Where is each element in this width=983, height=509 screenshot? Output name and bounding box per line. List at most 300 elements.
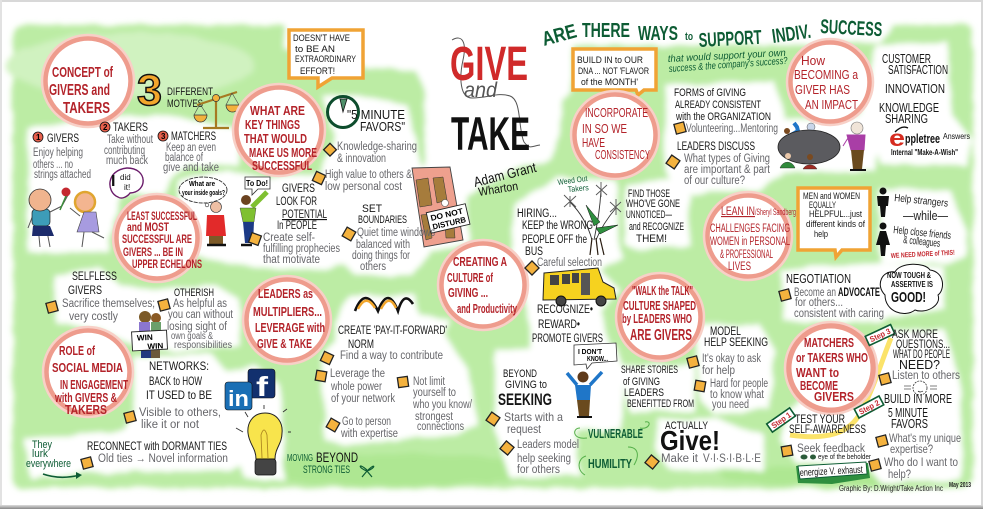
note: they lurk everywhere: They	[32, 439, 52, 451]
title: Give and Take: Wharton	[477, 179, 519, 199]
illustration: man in red	[206, 202, 226, 245]
header: are there ways: to	[685, 31, 693, 43]
header: are there ways: ARE	[540, 21, 579, 51]
text: beyond giving to seeking: GIVING to	[505, 379, 547, 391]
bullet: who do I want to help	[869, 455, 958, 481]
text: otherish	[158, 287, 234, 351]
text: forms of giving	[674, 87, 778, 135]
text: build in more 5 minute favors: BUILD IN MORE	[884, 392, 952, 406]
panel: role of social media: with GIVERS &	[54, 391, 117, 405]
banner: energize v exhaust: energize V. exhaust	[800, 465, 863, 479]
text: networks back to how it used to be: NETWORKS:	[149, 359, 209, 373]
logo: appletree answers: Internal "Make-A-Wish"	[891, 148, 958, 157]
text: find those who have gone unnoticed	[626, 188, 684, 245]
icon: man and woman silhouettes	[876, 188, 890, 256]
panel: concept of givers and takers: CONCEPT of	[52, 64, 114, 81]
text: networks back to how it used to be: BACK to HOW	[149, 374, 202, 388]
text: actually give make it visible	[645, 420, 761, 469]
text: model help seeking: HELP SEEKING	[704, 335, 768, 349]
text: selfless givers: Sacrifice themselves;	[62, 298, 155, 310]
icon: balance scale	[194, 92, 239, 128]
illustration: win win couple with sign: WIN	[137, 333, 153, 343]
words: vulnerable and humility	[575, 422, 649, 475]
bullet: leverage the whole power: Leverage the	[330, 368, 385, 380]
text: beyond giving to seeking: SEEKING	[498, 390, 552, 409]
panel: least successful and most successful: SUCCESSFUL ARE	[122, 234, 192, 246]
panel: creating a culture of giving: GIVING ...	[448, 286, 488, 300]
text: actually give make it visible: Make it	[661, 453, 699, 465]
text: ask more questions: QUESTIONS...	[896, 337, 950, 351]
text: model help seeking: MODEL	[710, 324, 741, 338]
bullet: careful selection: Careful selection	[537, 257, 602, 269]
text: negotiation: consistent with caring	[794, 308, 884, 320]
title: Give and Take: Adam Grant	[472, 159, 538, 190]
panel: creating a culture of giving: CULTURE of	[447, 271, 494, 285]
text: negotiation: Become an	[794, 287, 836, 299]
panel: role of social media: SOCIAL MEDIA	[52, 361, 123, 375]
panel: matchers or takers who want to become givers: MATCHERS	[804, 336, 854, 350]
text: forms of giving: FORMS of GIVING	[674, 87, 746, 99]
bullet: listen to others with face: Listen to others	[892, 370, 960, 382]
bullet: listen to others with face	[879, 370, 960, 395]
bullet: create self-fulfilling prophecies: Create self-	[263, 232, 315, 244]
number 3 with different motives: 3	[137, 66, 162, 115]
panel: least successful and most successful: LEAST SUCCESSFUL	[127, 211, 197, 223]
text: beyond giving to seeking	[498, 368, 552, 409]
text: find those who have gone unnoticed: and RECOGNIZE	[629, 221, 684, 233]
logo: appletree answers: e	[889, 125, 905, 151]
text: leaders discuss: What types of Giving	[684, 153, 770, 165]
panel: leaders as multipliers: LEADERS as	[258, 287, 313, 301]
panel: incorporate in so we have consistency: IN SO WE	[582, 122, 627, 136]
bullet: what's my unique expertise: expertise?	[890, 444, 933, 456]
text: leaders discuss: of our culture?	[684, 175, 745, 187]
text: matchers: MATCHERS	[171, 129, 216, 143]
panel: creating a culture of giving	[438, 240, 528, 330]
panel: creating a culture of giving: and Productivity	[457, 302, 517, 316]
text: help strangers while help close friends: Help close friends	[893, 224, 952, 242]
credit line: May 2013	[949, 482, 971, 489]
bullet: not limit yourself: Not limit	[413, 376, 446, 388]
text: negotiation: for others...	[795, 297, 843, 309]
speech box: extraordinary effort: EFFORT!	[300, 66, 335, 77]
panel: how becoming a giver has an impact: GIVER HAS	[795, 82, 850, 97]
text: negotiation: NEGOTIATION	[786, 271, 851, 286]
panel: how becoming a giver has an impact: How	[801, 53, 826, 68]
illustration: weed out takers plant: Takers	[567, 183, 589, 194]
icon: light bulb	[236, 405, 291, 475]
bullet: not limit yourself: who you know/	[412, 399, 473, 411]
panel: matchers or takers who want to become givers: GIVERS	[814, 390, 854, 404]
bullet: leaders model help seeking: Leaders model	[517, 439, 579, 451]
text: otherish: own goals &	[171, 331, 213, 342]
text: recognize reward promote givers	[532, 304, 603, 345]
panel: concept of givers and takers	[42, 35, 134, 127]
text: help strangers while help close friends	[891, 192, 955, 260]
panel: least successful and most successful: UPPER ECHELONS	[132, 259, 202, 271]
panel: lean in challenges: & PROFESSIONAL	[720, 249, 773, 261]
cloud: now tough and assertive is good: NOW TOUGH &	[887, 271, 931, 280]
panel: how becoming a giver has an impact: BECOMING a	[794, 67, 859, 82]
text: test your self-awareness	[789, 412, 866, 436]
panel: how becoming a giver has an impact: AN IMPACT	[805, 97, 858, 112]
speech box: build in to our DNA: BUILD IN to OUR	[577, 55, 643, 66]
arrow: yellow path through steps	[790, 338, 891, 437]
bullet: high value: High value to others &	[325, 169, 412, 181]
panel: concept of givers and takers: TAKERS	[63, 100, 110, 117]
illustration: boy with rose and girl	[28, 188, 104, 247]
text: forms of giving: ALREADY CONSISTENT	[675, 99, 761, 111]
panel: what are key things: MAKE US MORE	[249, 146, 317, 160]
text: customer satisfaction innovation knowledge sharing: INNOVATION	[885, 81, 945, 96]
header: are there ways: INDIV.	[771, 21, 812, 48]
text: customer satisfaction innovation knowledge sharing	[879, 51, 948, 126]
illustration: win win couple with sign: WIN	[147, 341, 164, 351]
bullet: leaders model help seeking: help seeking	[517, 453, 571, 465]
panel: matchers or takers who want to become givers: WANT to	[796, 366, 839, 380]
panel: role of social media: IN ENGAGEMENT	[60, 378, 128, 392]
text: negotiation	[779, 271, 884, 320]
text: givers: 1	[36, 133, 41, 142]
text: hiring keep the wrong people off the bus: BUS	[525, 246, 543, 258]
panel: incorporate in so we have consistency: HAVE	[582, 136, 605, 150]
text: customer satisfaction innovation knowledge sharing: SATISFACTION	[888, 62, 948, 77]
speech bubble: I don't know: I DON'T	[578, 349, 603, 356]
text: help strangers while help close friends: WE NEED MORE of THIS!	[891, 250, 955, 260]
panel: lean in challenges: WOMEN in PERSONAL	[710, 236, 790, 248]
icon: linkedin and facebook logos: f	[256, 371, 269, 402]
banner: energize v exhaust	[796, 462, 870, 484]
bullet: knowledge sharing: Knowledge-sharing	[337, 141, 417, 153]
header: are there ways: that would support your own	[668, 48, 786, 65]
bullet: create self-fulfilling prophecies: fulfilling prophecies	[263, 243, 340, 255]
header: are there ways: SUPPORT	[698, 27, 762, 52]
text: givers look for potential	[276, 183, 327, 232]
text: create pay-it-forward norm	[338, 325, 447, 351]
bullet: create self-fulfilling prophecies	[249, 232, 340, 266]
text: set boundaries	[358, 203, 407, 226]
bullet: leverage the whole power: of your network	[331, 393, 395, 405]
text: selfless givers	[46, 269, 155, 323]
text: ask more questions: ASK MORE	[892, 327, 938, 341]
bullet: go to person with expertise: Go to person	[342, 416, 391, 428]
text: forms of giving: with the ORGANIZATION	[675, 111, 771, 123]
text: recognize reward promote givers: RECOGNIZE•	[537, 304, 593, 316]
bullet: starts with a request: Starts with a	[504, 410, 563, 424]
bullet: quiet time windows: others	[360, 261, 386, 273]
text: otherish: responsibilities	[174, 340, 232, 351]
text: create pay-it-forward norm: NORM	[348, 339, 374, 351]
panel: what are key things: SUCCESSFUL	[252, 159, 312, 173]
bullet: quiet time windows: Quiet time windows	[357, 227, 435, 239]
tag: step 3: Step 3	[868, 327, 893, 344]
text: givers look for potential: GIVERS	[282, 183, 315, 195]
panel: lean in challenges: CHALLENGES FACING	[710, 223, 790, 235]
speech box: men and women equally helpful	[798, 188, 870, 257]
header: are there ways: SUCCESS	[820, 16, 883, 41]
text: selfless givers: GIVERS	[68, 283, 102, 297]
bullet: seek feedback: Seek feedback	[797, 443, 865, 455]
thought bubble: what are your inside goals	[179, 177, 227, 207]
panel: matchers or takers who want to become givers	[785, 322, 877, 414]
speech bubble: I did it: it!	[124, 183, 130, 192]
text: matchers: 3	[161, 132, 166, 141]
bullet: quiet time windows: doing things for	[352, 250, 410, 262]
text: otherish: you can without	[168, 309, 234, 321]
panel: leaders as multipliers: LEVERAGE with	[255, 321, 325, 335]
text: find those who have gone unnoticed: UNNOTICED—	[626, 209, 672, 221]
text: help strangers while help close friends: & colleagues	[903, 234, 941, 250]
panel: matchers or takers who want to become givers: or TAKERS WHO	[796, 351, 868, 365]
speech bubble: I did it: I	[111, 173, 115, 190]
text: find those who have gone unnoticed: WHO'VE GONE	[626, 198, 680, 210]
tag: step 1: Step 1	[770, 410, 793, 430]
bullet: visible to others: like it or not	[141, 419, 200, 431]
speech box: men and women equally helpful: help	[814, 229, 828, 240]
cloud: now tough and assertive is good: GOOD!	[891, 289, 926, 306]
panel: walk the talk	[616, 273, 704, 361]
bullet: quiet time windows	[342, 227, 435, 273]
text: givers look for potential: POTENTIAL	[282, 209, 327, 221]
text: set boundaries: SET	[362, 203, 382, 215]
text: model help seeking: to know what	[710, 389, 765, 401]
thought bubble: what are your inside goals: your inside goals?	[182, 190, 225, 197]
illustration: win win couple with sign	[132, 311, 168, 358]
text: model help seeking	[687, 324, 768, 411]
panel: leaders as multipliers: GIVE & TAKE	[257, 337, 312, 351]
illustration: people around table	[778, 122, 866, 170]
panel: incorporate in so we have consistency: INCORPORATE	[585, 106, 648, 120]
text: takers: contributing	[104, 145, 145, 157]
text: otherish: As helpful as	[173, 298, 227, 310]
note: they lurk everywhere	[26, 439, 82, 479]
panel: walk the talk: "WALK the TALK"	[632, 284, 693, 298]
text: givers: others ... no	[33, 159, 73, 171]
text: reconnect with dormant ties: Old ties → Novel information	[98, 453, 228, 465]
text: moving beyond strong ties	[287, 449, 374, 477]
speech bubble: I don't know: KNOW...	[587, 356, 608, 363]
text: networks back to how it used to be	[146, 359, 212, 402]
panel: leaders as multipliers: MULTIPLIERS...	[253, 305, 322, 319]
text: leaders discuss: are important & part	[684, 164, 771, 176]
speech box: build in to our DNA: DNA ... NOT 'FLAVOR	[578, 66, 649, 77]
illustration: weed out takers plant	[557, 174, 621, 255]
bullet: knowledge sharing	[324, 141, 417, 165]
panel: what are key things: KEY THINGS	[245, 118, 300, 132]
header: are there ways	[540, 16, 883, 75]
text: takers: TAKERS	[113, 120, 148, 134]
text: model help seeking: Hard for people	[710, 378, 768, 390]
panel: walk the talk: by LEADERS WHO	[622, 312, 692, 326]
text: givers: GIVERS	[47, 131, 79, 145]
bullet: knowledge sharing: & innovation	[337, 153, 386, 165]
bullet: find a way	[320, 350, 443, 365]
bullet: what's my unique expertise: What's my unique	[889, 431, 961, 445]
text: moving beyond strong ties: STRONG TIES	[303, 464, 350, 476]
speech box: men and women equally helpful: HELPFUL...just	[809, 209, 862, 220]
panel: least successful and most successful: GIVERS ... BE IN	[123, 247, 183, 259]
text: actually give make it visible: V·I·S·I·B·L·E	[703, 453, 761, 465]
speech bubble: to do	[245, 177, 270, 195]
illustration: man in blue with raised arms	[567, 372, 602, 417]
panel: role of social media: TAKERS	[65, 403, 107, 417]
text: matchers: give and take	[163, 162, 219, 174]
speech box: extraordinary effort: DOESN'T HAVE	[293, 33, 350, 44]
bullet: what's my unique expertise	[876, 431, 961, 456]
bullet: high value: low personal cost	[325, 181, 403, 193]
panel: leaders as multipliers	[243, 276, 331, 364]
tag: step 2: Step 2	[857, 398, 881, 417]
panel: incorporate in so we have consistency: CONSISTENCY	[595, 148, 650, 162]
text: reconnect with dormant ties: RECONNECT with DORMANT TIES	[87, 439, 227, 453]
text: share stories of giving: SHARE STORIES	[621, 364, 678, 376]
panel: creating a culture of giving: CREATING A	[453, 255, 507, 269]
panel: concept of givers and takers: GIVERS and	[49, 82, 110, 99]
illustration: door with do not disturb sign: DISTURB	[432, 215, 467, 232]
text: find those who have gone unnoticed: THEM!	[636, 233, 667, 245]
text: givers: Enjoy helping	[33, 147, 83, 159]
icon: linkedin and facebook logos: in	[228, 386, 249, 411]
panel: least successful and most successful: and MOST	[127, 222, 169, 234]
text: beyond giving to seeking: BEYOND	[503, 368, 537, 380]
text: actually give make it visible: Give!	[660, 425, 720, 456]
text: find those who have gone unnoticed: FIND THOSE	[628, 188, 670, 200]
text: selfless givers: very costly	[69, 311, 118, 323]
bullet: not limit yourself: yourself to	[413, 387, 456, 399]
speech bubble: I did it	[110, 168, 143, 198]
text: negotiation: ADVOCATE	[838, 285, 880, 299]
bullet: quiet time windows: balanced with	[356, 239, 410, 251]
text: selfless givers: SELFLESS	[72, 269, 117, 283]
bullet: high value	[312, 169, 412, 193]
text: model help seeking: you need	[712, 399, 749, 411]
text: takers	[100, 120, 154, 167]
text: test your self-awareness: SELF-AWARENESS	[789, 422, 866, 436]
words: vulnerable and humility: VULNERABLE	[588, 426, 643, 441]
speech bubble: I did it: did	[120, 173, 131, 182]
bullet: careful selection	[525, 257, 602, 275]
text: givers look for potential: In PEOPLE	[277, 220, 317, 232]
panel: walk the talk: ARE GIVERS	[630, 327, 692, 344]
bullet: visible to others: Visible to others,	[139, 405, 221, 419]
panel: lean in challenges	[704, 192, 796, 280]
text: givers	[33, 131, 91, 181]
number 3 with different motives: DIFFERENT	[167, 86, 213, 98]
text: model help seeking: It's okay to ask	[702, 353, 761, 365]
panel: incorporate in so we have consistency	[571, 91, 659, 179]
thought bubble: what are your inside goals: What are	[189, 181, 215, 188]
bullet: seek feedback	[781, 443, 872, 461]
text: takers: much back	[106, 155, 148, 167]
bullet: go to person with expertise: with expertise	[340, 428, 398, 440]
title: Give and Take: and	[464, 79, 498, 102]
bullet: not limit yourself	[397, 376, 473, 433]
speech box: build in to our DNA: of the MONTH'	[581, 77, 638, 88]
text: takers: 2	[103, 123, 108, 132]
icon: clock with 5 minute favors	[328, 96, 405, 134]
panel: what are key things: WHAT ARE	[250, 104, 305, 118]
panel: walk the talk: CULTURE SHAPED	[623, 299, 696, 313]
text: leaders discuss	[666, 139, 771, 187]
number 3 with different motives	[137, 66, 213, 115]
bullet: create self-fulfilling prophecies: that motivate	[263, 254, 320, 266]
title: Give and Take	[450, 38, 540, 199]
title: Give and Take: TAKE	[451, 107, 530, 160]
icon: hopping arrows	[355, 298, 413, 311]
speech box: men and women equally helpful: different kinds of	[806, 219, 865, 230]
speech box: men and women equally helpful: EQUALLY	[809, 200, 836, 211]
illustration: door with do not disturb sign	[412, 167, 470, 247]
speech box: extraordinary effort: EXTRAORDINARY	[295, 54, 356, 65]
icon: clock with 5 minute favors: "5 MINUTE	[347, 107, 405, 122]
panel: least successful and most successful	[113, 194, 202, 282]
speech box: build in to our DNA	[573, 49, 656, 95]
bullet: seek feedback: eye of the beholder	[818, 454, 872, 461]
panel: role of social media	[43, 327, 133, 417]
text: recognize reward promote givers: PROMOTE GIVERS	[532, 333, 603, 345]
text: share stories of giving	[621, 364, 694, 410]
text: model help seeking: for help	[702, 365, 735, 377]
text: create pay-it-forward norm: CREATE 'PAY-IT-FORWARD'	[338, 325, 447, 337]
illustration: weed out takers plant: Weed Out	[557, 174, 589, 187]
bullet: find a way: Find a way to contribute	[340, 350, 443, 362]
icon: linkedin and facebook logos	[225, 369, 275, 411]
text: actually give make it visible: ACTUALLY	[665, 420, 709, 432]
text: customer satisfaction innovation knowledge sharing: SHARING	[885, 111, 928, 126]
panel: matchers or takers who want to become givers: BECOME	[800, 379, 838, 393]
text: moving beyond strong ties: BEYOND	[316, 449, 358, 465]
bullet: leverage the whole power: whole power	[330, 381, 382, 393]
illustration: man in green pointing	[240, 192, 267, 245]
illustration: school bus	[543, 268, 616, 306]
text: forms of giving: Volunteering...Mentoring	[686, 123, 778, 135]
icon: clock with 5 minute favors: FAVORS"	[360, 119, 405, 134]
bullet: starts with a request	[486, 410, 563, 436]
header: are there ways: success & the company's success?	[668, 56, 788, 75]
panel: role of social media: ROLE of	[59, 344, 96, 358]
text: help strangers while help close friends: Help strangers	[894, 192, 949, 210]
text: givers: strings attached	[34, 169, 91, 181]
text: hiring keep the wrong people off the bus: PEOPLE OFF the	[522, 234, 587, 246]
cloud: now tough and assertive is good	[880, 264, 943, 314]
text: ask more questions	[892, 327, 950, 372]
credit line: Graphic By: D.Wright/Take Action Inc	[839, 484, 943, 493]
text: share stories of giving: of GIVING	[623, 376, 660, 388]
number 3 with different motives: MOTIVES	[167, 98, 203, 110]
text: hiring keep the wrong people off the bus: KEEP the WRONG	[522, 220, 593, 232]
bullet: not limit yourself: connections	[417, 421, 464, 433]
bullet: not limit yourself: strongest	[415, 411, 454, 423]
bullet: go to person with expertise	[326, 416, 398, 440]
text: networks back to how it used to be: IT USED to BE	[146, 388, 212, 402]
text: leaders discuss: LEADERS DISCUSS	[677, 139, 755, 153]
text: matchers: Keep an even	[166, 142, 216, 154]
text: takers: Take without	[107, 134, 154, 146]
speech box: extraordinary effort: to BE AN	[295, 44, 335, 55]
text: hiring keep the wrong people off the bus: HIRING...	[517, 208, 557, 220]
text: build in more 5 minute favors	[884, 392, 952, 431]
text: otherish: OTHERISH	[174, 287, 214, 299]
speech box: extraordinary effort	[289, 30, 363, 87]
panel: what are key things	[233, 84, 325, 176]
panel: how becoming a giver has an impact	[787, 39, 873, 125]
panel: what are key things: THAT WOULD	[244, 132, 307, 146]
text: ask more questions: NEED?	[899, 357, 940, 372]
speech box: men and women equally helpful: MEN and WOMEN	[803, 191, 860, 202]
text: reconnect with dormant ties	[81, 439, 228, 469]
bullet: starts with a request: request	[507, 424, 542, 436]
note: they lurk everywhere: everywhere	[26, 458, 71, 470]
